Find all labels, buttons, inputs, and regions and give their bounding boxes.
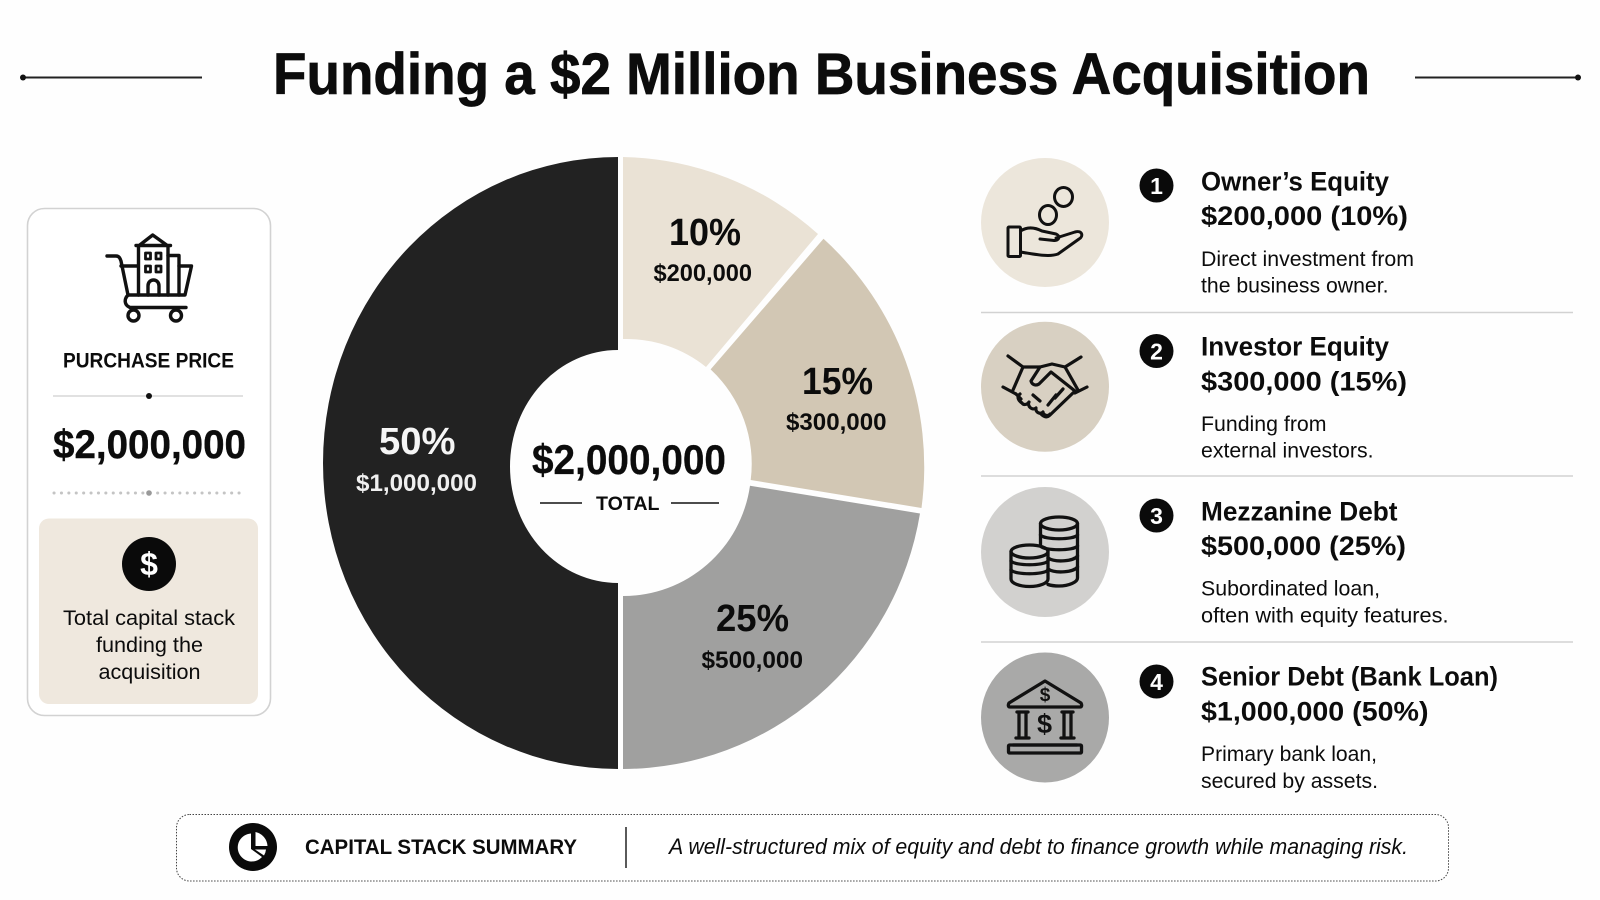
label: 50%: $1,000,000 xyxy=(356,470,477,497)
heading xyxy=(1201,496,1406,561)
heading xyxy=(1201,166,1408,231)
segment: mezzanine debt 25% xyxy=(623,486,920,769)
list item 2: investor equity xyxy=(981,322,1407,462)
number badge 2: 2 xyxy=(1150,338,1163,364)
description: external investors. xyxy=(1201,438,1374,462)
number badge 3: 3 xyxy=(1150,503,1163,529)
number badge 1: 1 xyxy=(1150,173,1163,199)
callout: total capital stack: Total capital stack xyxy=(63,606,235,630)
icon: coin stacks xyxy=(981,487,1109,617)
label: 25% xyxy=(702,598,803,674)
heading: Senior Debt (Bank Loan) xyxy=(1201,662,1498,692)
segment: owner's equity 10% xyxy=(623,157,818,367)
callout: total capital stack: $ xyxy=(140,546,158,582)
description: often with equity features. xyxy=(1201,604,1448,628)
heading xyxy=(1201,662,1498,726)
donut chart xyxy=(323,157,924,769)
description xyxy=(1201,412,1374,462)
label: 10%: 10% xyxy=(669,212,741,254)
heading: $1,000,000 (50%) xyxy=(1201,696,1428,726)
label: 10% xyxy=(654,212,752,287)
summary text: A well-structured mix of equity and debt to finance growth while managing risk. xyxy=(667,834,1408,859)
heading: $300,000 (15%) xyxy=(1201,366,1407,396)
heading: $500,000 (25%) xyxy=(1201,531,1406,561)
icon: bank xyxy=(981,652,1109,782)
icon: shopping cart with building xyxy=(107,235,192,321)
label: 15%: 15% xyxy=(802,361,873,403)
description xyxy=(1201,742,1378,793)
description: Funding from xyxy=(1201,412,1326,436)
description: Direct investment from xyxy=(1201,247,1414,271)
number badge 4: 4 xyxy=(1150,669,1163,695)
heading: Owner’s Equity xyxy=(1201,166,1389,196)
label: purchase price: PURCHASE PRICE xyxy=(63,350,234,372)
heading: Mezzanine Debt xyxy=(1201,496,1398,526)
icon: hand with coins xyxy=(981,158,1109,287)
center total xyxy=(532,436,726,515)
icon: bank: $ xyxy=(1040,685,1051,706)
label: 10%: $200,000 xyxy=(654,260,752,287)
icon: bank: $ xyxy=(1037,709,1052,739)
label: 15%: $300,000 xyxy=(786,409,886,436)
heading: $200,000 (10%) xyxy=(1201,201,1408,231)
label: 50%: 50% xyxy=(379,421,456,463)
title: Funding a $2 Million Business Acquisition xyxy=(273,42,1370,107)
heading xyxy=(1201,332,1407,396)
panel: purchase price xyxy=(28,208,270,716)
callout: total capital stack: acquisition xyxy=(98,660,200,684)
description: secured by assets. xyxy=(1201,769,1378,793)
description xyxy=(1201,576,1448,628)
number badge 3 xyxy=(1140,498,1174,532)
segment: senior debt 50% xyxy=(323,157,618,769)
icon: pie chart xyxy=(229,823,277,871)
number badge 1 xyxy=(1140,168,1174,202)
panel: capital stack summary xyxy=(176,814,1448,881)
icon: handshake xyxy=(981,322,1109,452)
number badge 4 xyxy=(1140,664,1174,698)
description: Primary bank loan, xyxy=(1201,742,1377,766)
center total: TOTAL xyxy=(596,493,660,515)
label: 15% xyxy=(786,361,886,436)
label: capital stack summary: CAPITAL STACK SUMMARY xyxy=(305,836,577,859)
label: 25%: $500,000 xyxy=(702,647,803,674)
label: 25%: 25% xyxy=(716,598,789,640)
number badge 2 xyxy=(1140,334,1174,368)
callout: total capital stack: funding the xyxy=(96,633,203,657)
callout: total capital stack xyxy=(39,518,258,704)
heading: Investor Equity xyxy=(1201,332,1389,362)
center total: $2,000,000 xyxy=(532,436,726,483)
list item 3: mezzanine debt xyxy=(981,487,1448,628)
value: purchase price: $2,000,000 xyxy=(53,423,246,467)
label: 50% xyxy=(356,421,477,497)
description xyxy=(1201,247,1414,298)
description: the business owner. xyxy=(1201,274,1388,298)
list item 1: owner's equity xyxy=(981,158,1414,298)
list item 4: senior debt xyxy=(981,652,1498,793)
description: Subordinated loan, xyxy=(1201,576,1380,600)
segment: investor equity 15% xyxy=(711,239,924,508)
